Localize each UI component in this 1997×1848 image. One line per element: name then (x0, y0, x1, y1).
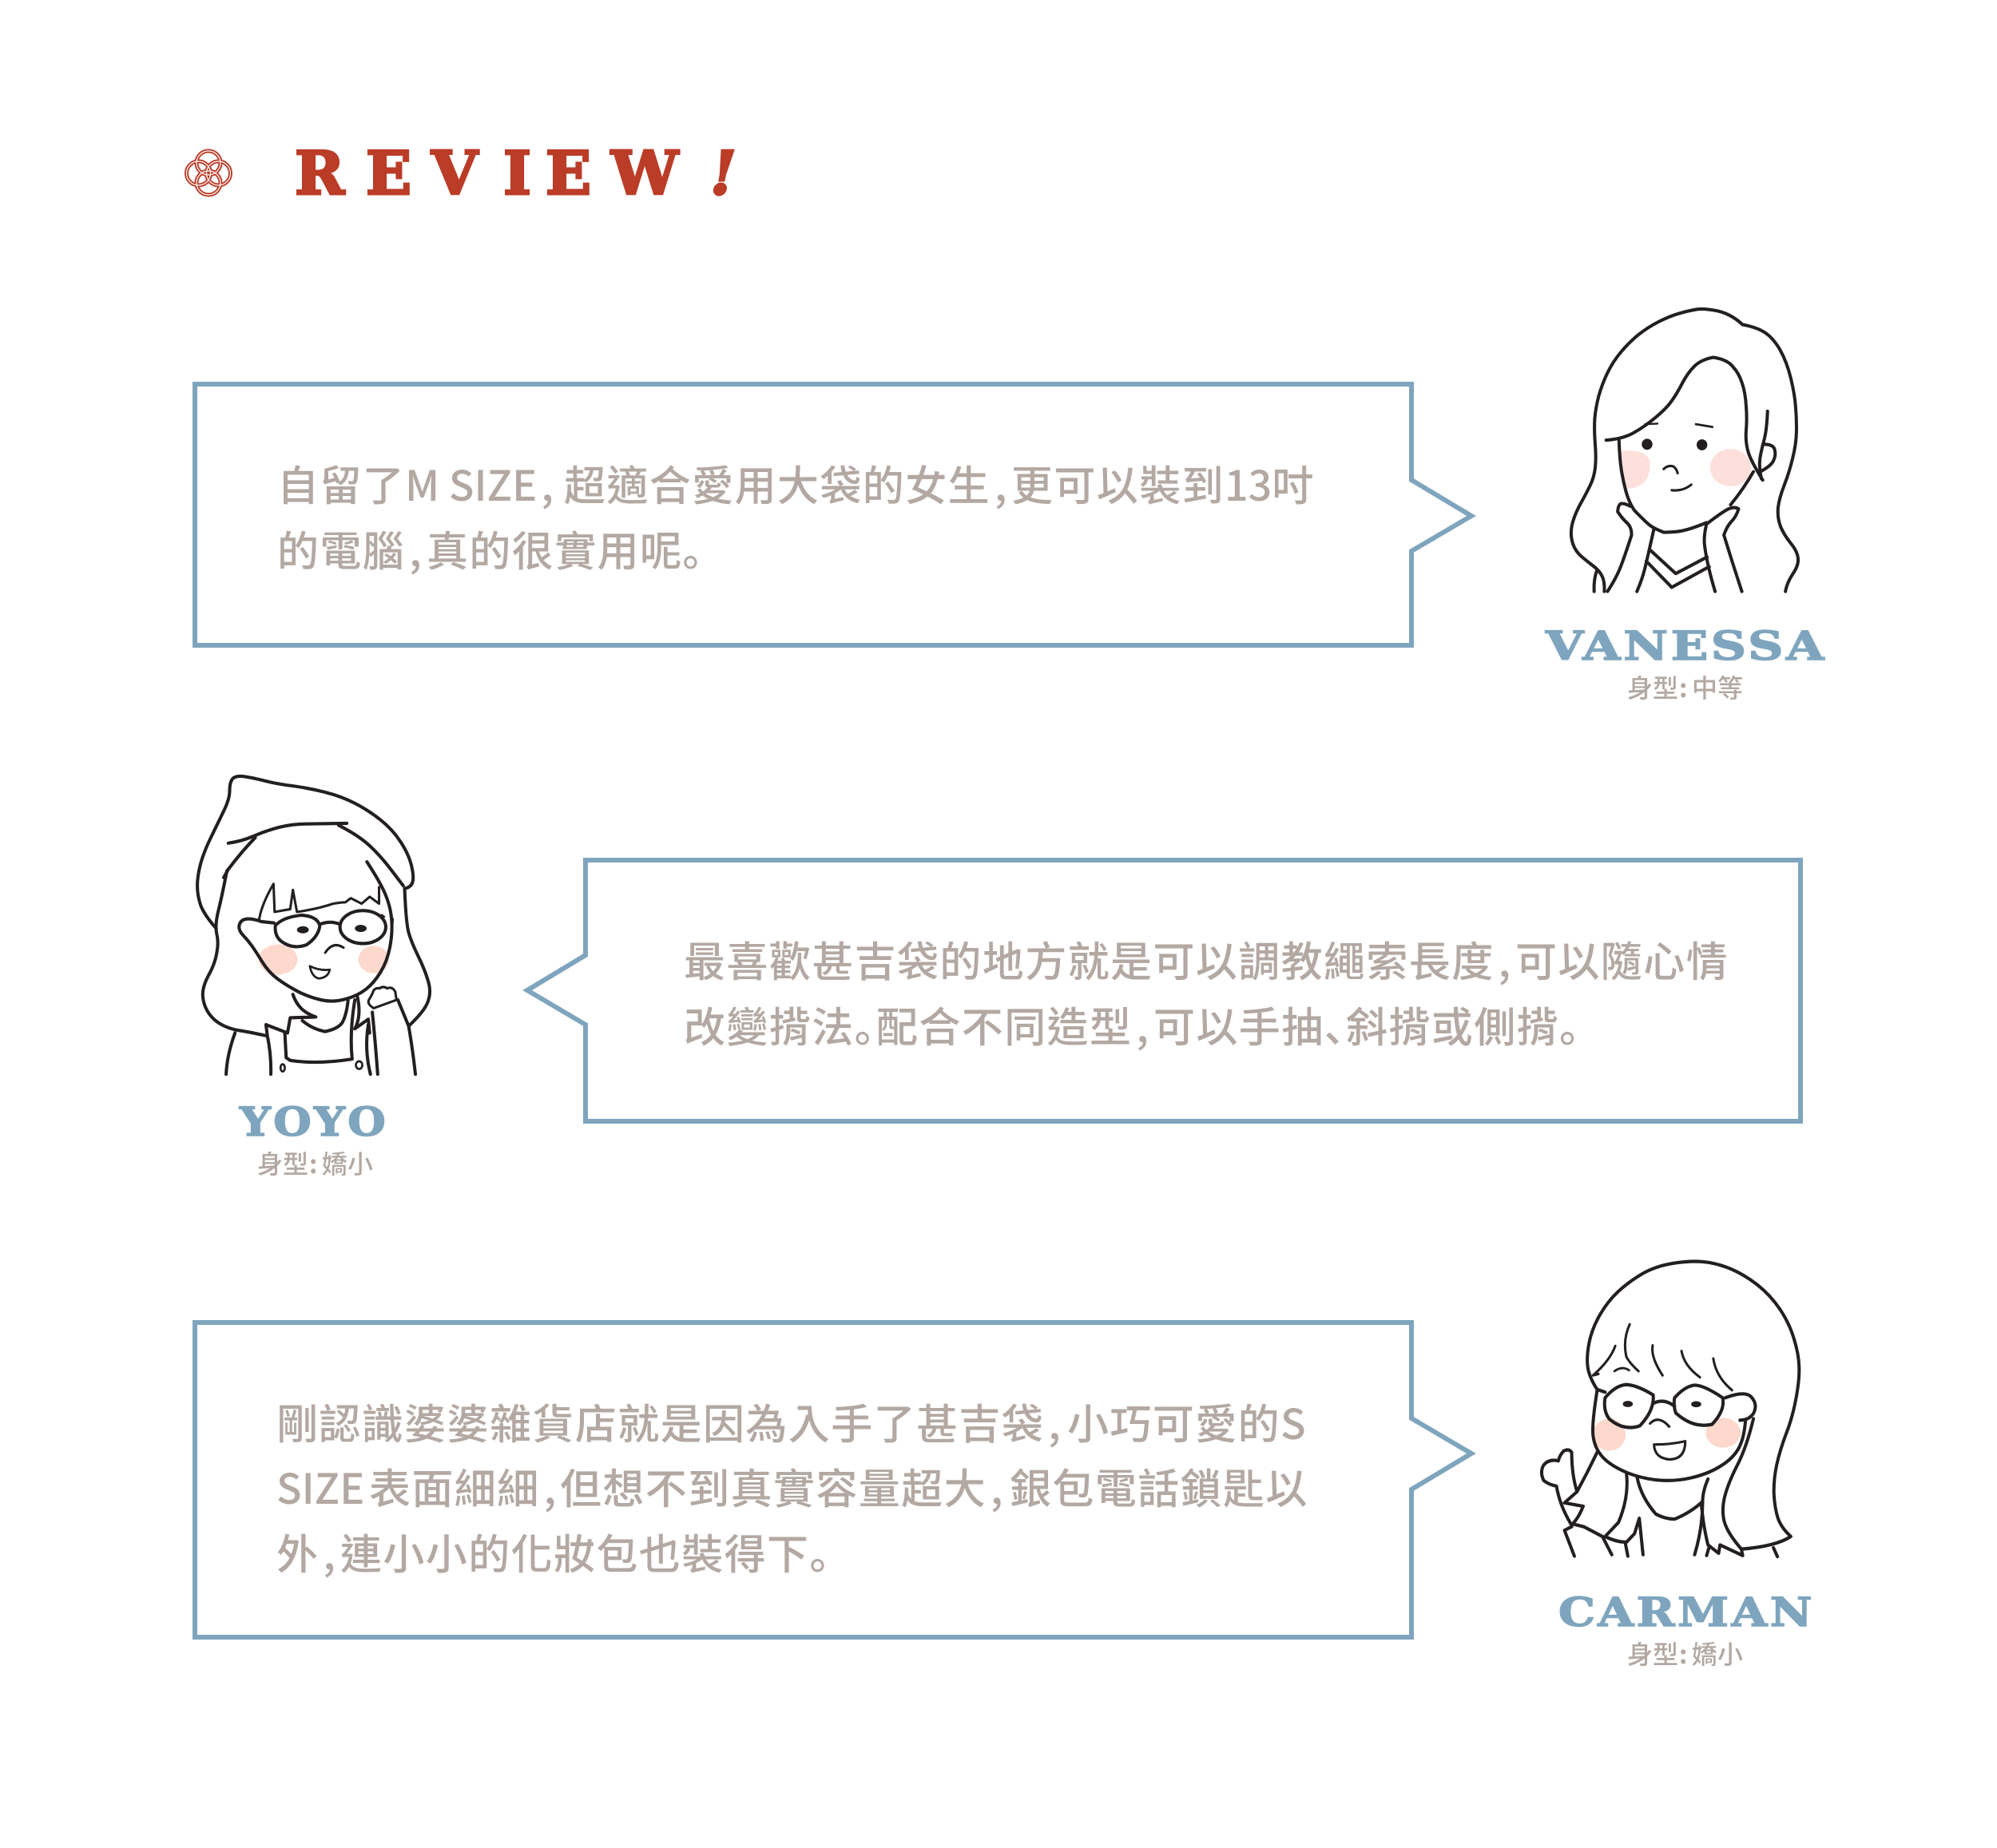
name: YOYO: YOYO (239, 1098, 388, 1145)
portrait: Yoyo (197, 776, 430, 1074)
body type label: Yoyo: : (309, 1144, 317, 1181)
name: VANESSA: VANESSA (1545, 622, 1827, 669)
text: review by Yoyo (684, 929, 1729, 1054)
text: review by Carman: 連小小的化妝包也裝得下 (340, 1521, 809, 1581)
text: review by Yoyo: , (1136, 994, 1149, 1054)
text: review by Yoyo: 改變揹法。 (684, 994, 897, 1054)
portrait: Carman (1542, 1261, 1799, 1557)
text: review by Vanessa (277, 453, 1315, 578)
portrait: Vanessa (1571, 309, 1798, 592)
text: review by Yoyo: 可以隨心情 (1515, 929, 1729, 989)
text: review by Carman: SIZE (276, 1456, 364, 1516)
text: review by Carman: 。 (809, 1521, 852, 1581)
text: review by Vanessa: 更可以裝到 (1011, 453, 1225, 513)
panel: review speech bubble Yoyo (527, 860, 1800, 1121)
text: review by Vanessa: 自留了 (277, 453, 405, 513)
text: review by Vanessa: 。 (682, 518, 725, 578)
text: review by Vanessa: 超適合愛用大袋的女生 (564, 453, 991, 513)
text: review by Yoyo: 配合不同造型 (876, 994, 1132, 1054)
text: review by Vanessa: 的電腦, (277, 518, 423, 578)
body type label: Yoyo: 身型 (257, 1144, 308, 1181)
text: review by Vanessa: 真的很實用呢 (427, 518, 682, 578)
body type label: Yoyo: 嬌小 (322, 1144, 373, 1181)
body type label: Carman: : (1679, 1635, 1687, 1672)
text: review by Carman: 剛認識婆婆雜貨店就是因為入手了甚吉袋, (276, 1391, 1062, 1451)
text: review by Yoyo: 。 (1559, 994, 1602, 1054)
body type label: Vanessa: 身型 (1627, 668, 1678, 705)
text: review by Carman: S (1280, 1391, 1306, 1451)
text: review by Vanessa: , (995, 453, 1008, 513)
body type label: Carman: 身型 (1627, 1635, 1678, 1672)
icon: red knot (187, 151, 230, 195)
text: review by Vanessa: , (541, 453, 554, 513)
text: review by Yoyo: 最喜歡甚吉袋的地方就是可以調教繩索長度, (684, 929, 1512, 989)
text: review by Carman: , (991, 1456, 1004, 1516)
panel: review speech bubble Carman (195, 1323, 1471, 1637)
text: review by Carman (276, 1391, 1308, 1581)
text: review by Carman: 小巧可愛的 (1067, 1391, 1280, 1451)
title: REVIEW ! (295, 138, 736, 208)
text: review by Carman: 但想不到真實容量超大 (560, 1456, 987, 1516)
text: review by Carman: , (544, 1456, 558, 1516)
text: review by Yoyo: 斜揹或側揹 (1346, 994, 1559, 1054)
text: review by Carman: 銀包電話鎖匙以 (1010, 1456, 1308, 1516)
name: CARMAN: CARMAN (1558, 1588, 1815, 1636)
panel: review speech bubble Vanessa (195, 384, 1471, 645)
body type label: Vanessa: 中等 (1692, 668, 1743, 705)
body type label: Vanessa: : (1679, 668, 1687, 705)
body type label: Carman: 嬌小 (1692, 1635, 1743, 1672)
text: review by Yoyo: 可以手抽 (1153, 994, 1324, 1054)
text: review by Vanessa: 13吋 (1225, 453, 1315, 513)
text: review by Yoyo: 、 (1324, 994, 1367, 1054)
text: review by Carman: 表面細細 (369, 1456, 540, 1516)
text: review by Carman: 外, (276, 1521, 336, 1581)
text: review by Vanessa: M SIZE (405, 453, 537, 513)
